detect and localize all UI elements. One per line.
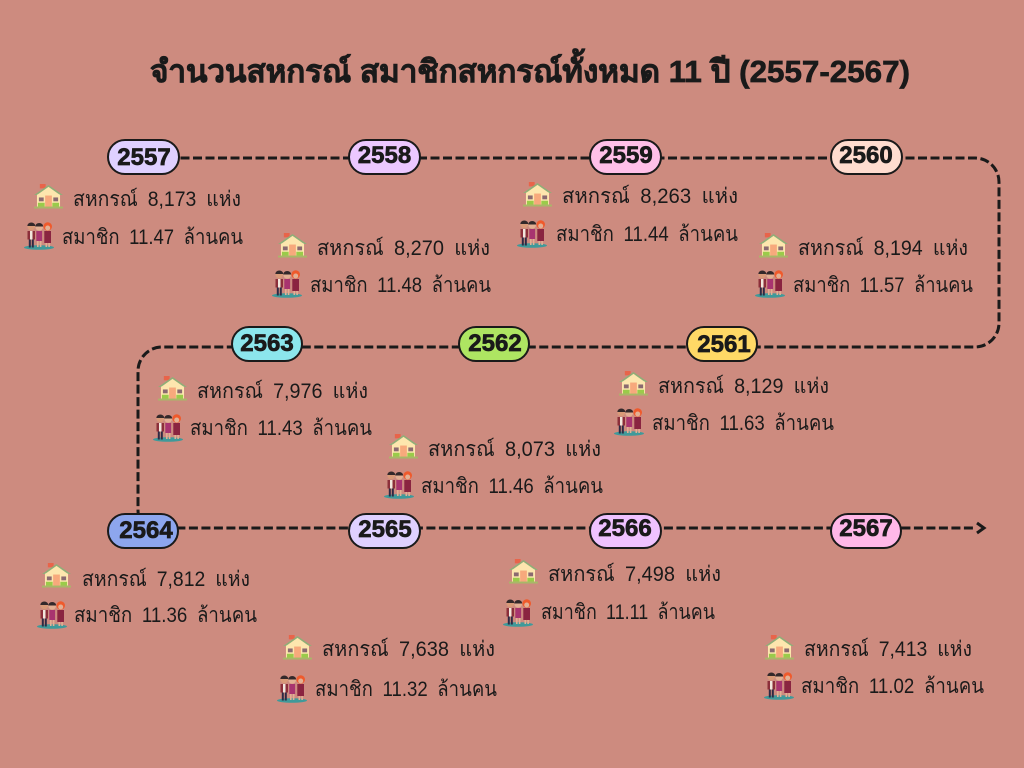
data 2564 bbox=[37, 563, 257, 629]
year 2560: 2560 bbox=[839, 142, 893, 169]
data 2559 bbox=[517, 182, 738, 248]
data 2563: สมาชิก 11.43 ล้านคน bbox=[190, 417, 372, 440]
year 2563 bbox=[232, 327, 302, 361]
data 2566 bbox=[503, 559, 721, 627]
year 2558 bbox=[349, 140, 420, 174]
timeline path bbox=[138, 158, 999, 528]
year 2564 bbox=[108, 514, 178, 548]
data 2559: สมาชิก 11.44 ล้านคน bbox=[556, 223, 738, 246]
data 2564: สมาชิก 11.36 ล้านคน bbox=[74, 604, 257, 627]
data 2561: สมาชิก 11.63 ล้านคน bbox=[652, 412, 834, 435]
data 2562: สหกรณ์ 8,073 แห่ง bbox=[428, 437, 601, 461]
data 2565: สหกรณ์ 7,638 แห่ง bbox=[322, 637, 495, 661]
year 2567: 2567 bbox=[839, 515, 893, 542]
data 2557: สหกรณ์ 8,173 แห่ง bbox=[73, 187, 241, 211]
data 2567: สหกรณ์ 7,413 แห่ง bbox=[804, 637, 972, 661]
data 2561: สหกรณ์ 8,129 แห่ง bbox=[658, 374, 829, 398]
year 2559: 2559 bbox=[599, 142, 653, 169]
year 2567 bbox=[831, 514, 901, 548]
data 2565 bbox=[277, 635, 497, 703]
data 2560 bbox=[755, 233, 973, 298]
data 2557 bbox=[24, 184, 243, 250]
data 2566: สมาชิก 11.11 ล้านคน bbox=[541, 601, 715, 624]
year 2562 bbox=[459, 327, 529, 361]
arrow head bbox=[977, 523, 984, 533]
data 2561 bbox=[614, 371, 834, 436]
data 2562 bbox=[384, 434, 603, 499]
year 2561 bbox=[687, 327, 757, 361]
data 2559: สหกรณ์ 8,263 แห่ง bbox=[562, 184, 738, 208]
year 2566: 2566 bbox=[598, 515, 652, 542]
data 2558 bbox=[272, 233, 491, 298]
data 2565: สมาชิก 11.32 ล้านคน bbox=[315, 678, 497, 701]
data 2558: สหกรณ์ 8,270 แห่ง bbox=[317, 236, 490, 260]
year 2557: 2557 bbox=[117, 144, 171, 171]
year 2564: 2564 bbox=[119, 517, 173, 544]
year 2562: 2562 bbox=[468, 330, 522, 357]
data 2567 bbox=[764, 635, 984, 700]
data 2563 bbox=[153, 376, 372, 442]
year 2561: 2561 bbox=[697, 331, 751, 358]
data 2560: สหกรณ์ 8,194 แห่ง bbox=[798, 236, 968, 260]
year 2565: 2565 bbox=[358, 516, 412, 543]
year 2558: 2558 bbox=[358, 142, 411, 169]
year 2559 bbox=[590, 140, 661, 174]
year 2560 bbox=[831, 140, 902, 174]
year 2566 bbox=[590, 514, 661, 548]
year 2563: 2563 bbox=[240, 330, 294, 357]
data 2567: สมาชิก 11.02 ล้านคน bbox=[801, 675, 984, 698]
data 2563: สหกรณ์ 7,976 แห่ง bbox=[197, 379, 368, 403]
year 2565 bbox=[349, 514, 420, 548]
data 2564: สหกรณ์ 7,812 แห่ง bbox=[82, 567, 250, 591]
data 2566: สหกรณ์ 7,498 แห่ง bbox=[548, 562, 721, 586]
year 2557 bbox=[108, 140, 179, 174]
data 2558: สมาชิก 11.48 ล้านคน bbox=[310, 274, 491, 297]
title: จำนวนสหกรณ์ สมาชิกสหกรณ์ทั้งหมด 11 ปี (2557-2567) bbox=[150, 48, 910, 89]
data 2557: สมาชิก 11.47 ล้านคน bbox=[62, 226, 243, 249]
data 2562: สมาชิก 11.46 ล้านคน bbox=[421, 475, 603, 498]
data 2560: สมาชิก 11.57 ล้านคน bbox=[793, 274, 973, 297]
